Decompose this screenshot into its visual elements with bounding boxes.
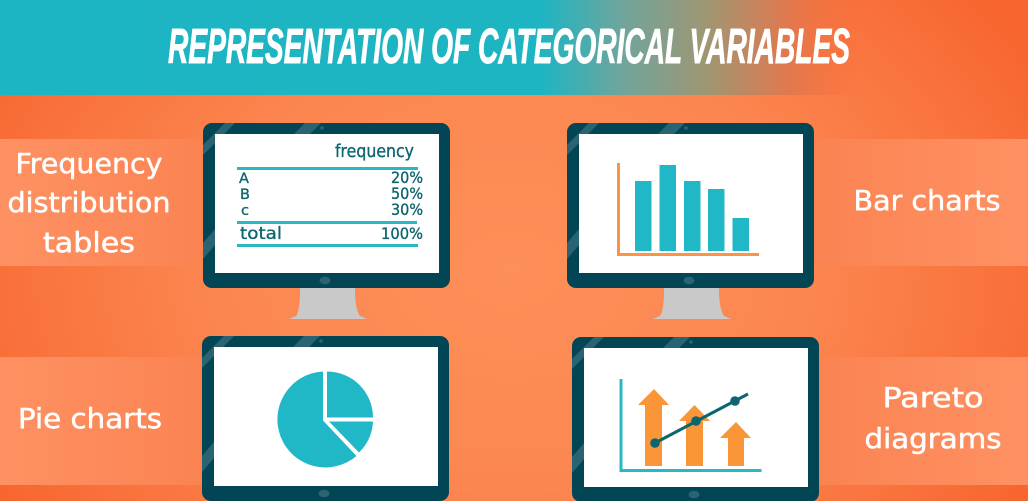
bar chart [617, 163, 759, 256]
panel: bar charts label: Bar charts [854, 184, 1000, 217]
frequency table: frequency [335, 141, 414, 162]
monitor: bar chart [567, 123, 814, 319]
panel: pareto diagrams label: diagrams [864, 422, 1002, 455]
monitor: frequency table [203, 123, 450, 319]
pie chart [277, 372, 373, 467]
panel: frequency distribution tables label [0, 139, 204, 266]
monitor: pareto diagram [572, 337, 819, 501]
panel: frequency distribution tables label: tables [43, 226, 135, 259]
frequency table: c [241, 203, 249, 219]
panel: pareto diagrams label [819, 357, 1028, 485]
pareto chart [620, 379, 762, 472]
title banner [0, 0, 860, 95]
panel: pie charts label [0, 357, 203, 485]
frequency table [237, 141, 423, 247]
frequency table: B [240, 187, 250, 203]
panel: pie charts label: Pie charts [18, 402, 162, 435]
frequency table: A [239, 171, 249, 187]
panel: pareto diagrams label: Pareto [882, 381, 984, 414]
monitor: pie chart [202, 336, 449, 501]
frequency table: 100% [381, 224, 423, 243]
frequency table: 30% [391, 200, 423, 219]
panel: frequency distribution tables label: Frequency [16, 147, 162, 180]
frequency table: total [240, 224, 282, 244]
panel: bar charts label [814, 139, 1028, 266]
frequency table: 20% [391, 168, 423, 187]
frequency table: 50% [391, 184, 423, 203]
panel: frequency distribution tables label: distribution [8, 186, 170, 219]
